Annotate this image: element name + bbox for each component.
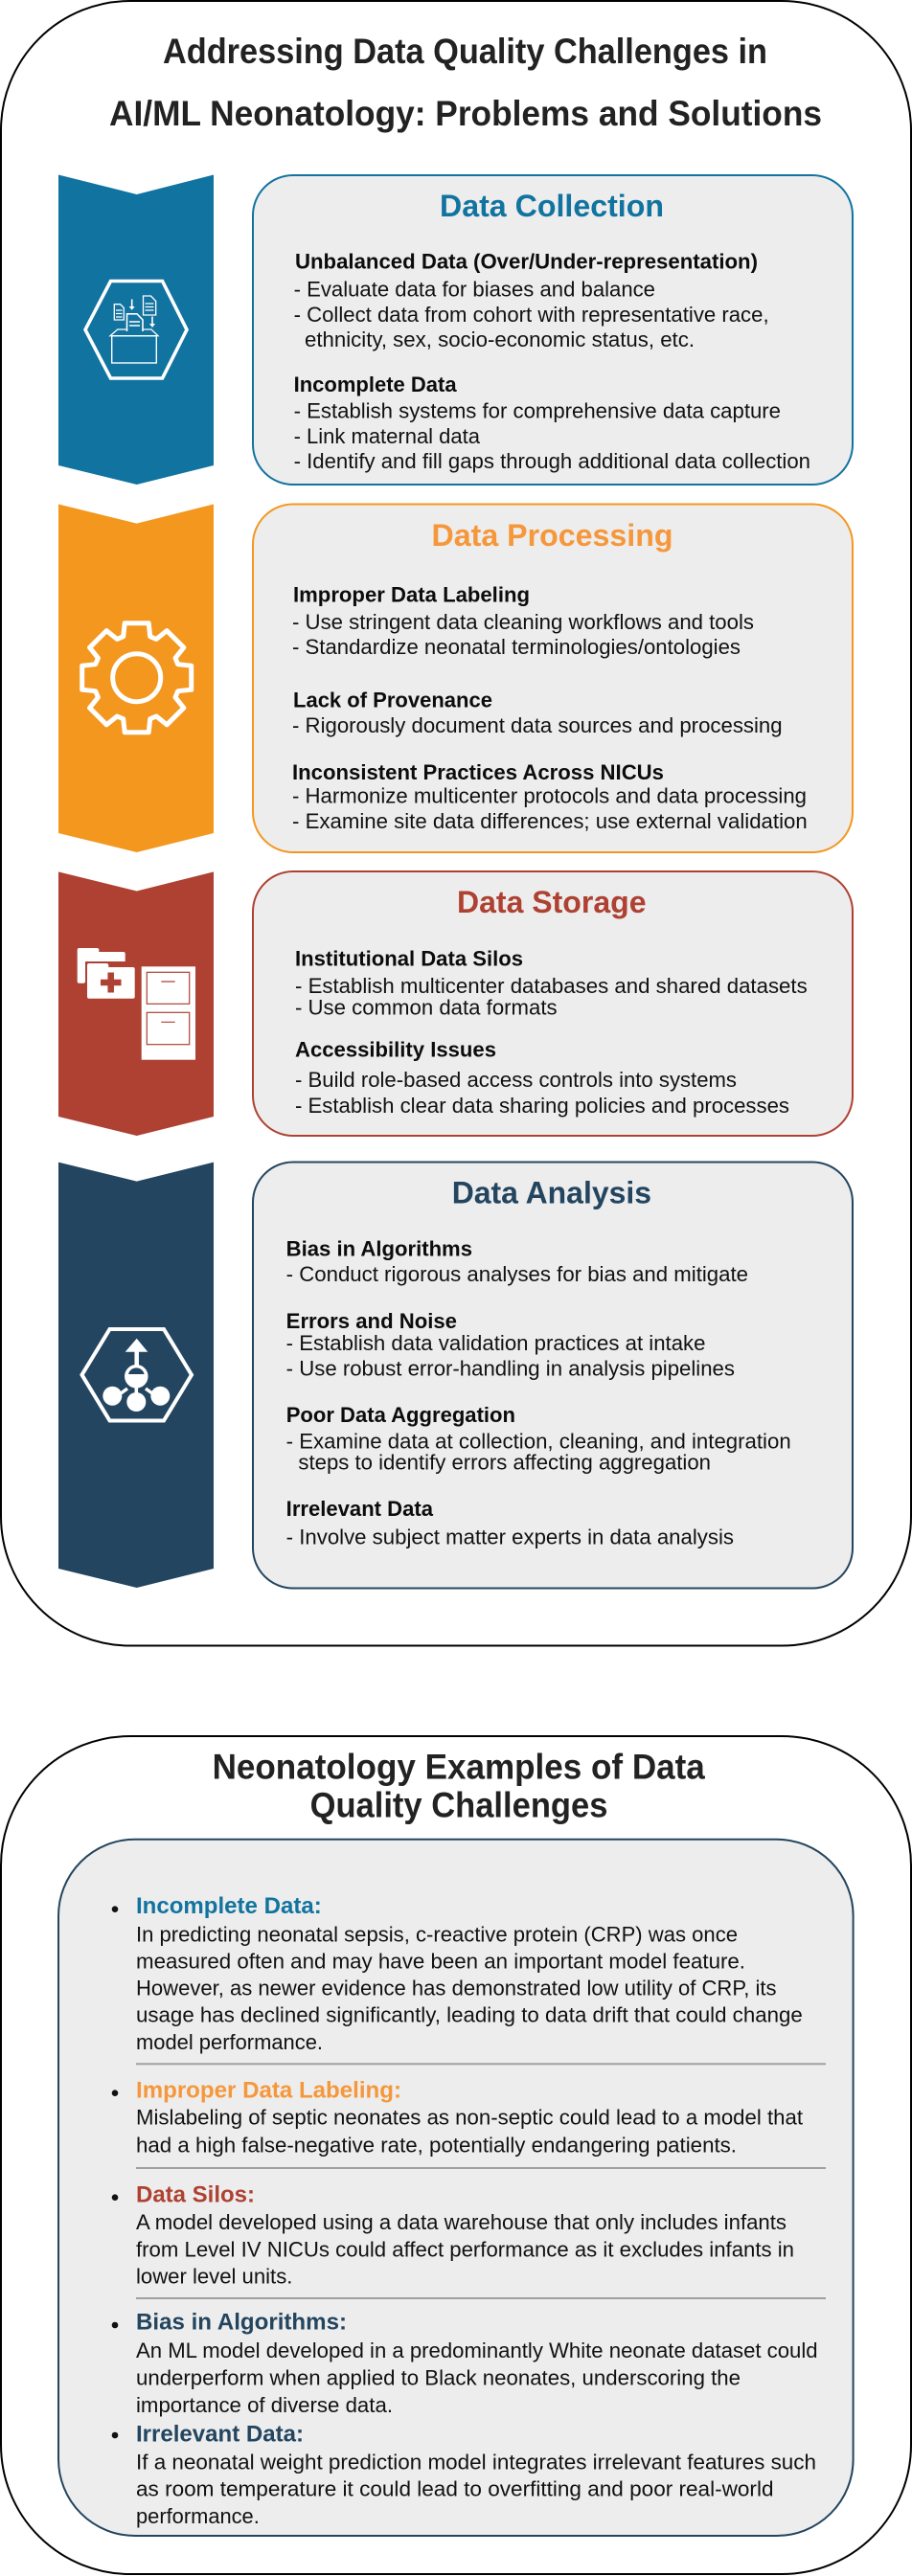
text block: institutional data silos: Institutional Data Silos xyxy=(295,947,523,971)
title xyxy=(213,1747,706,1825)
text block: bias in algorithms: Bias in Algorithms xyxy=(286,1236,472,1260)
example: irrelevant data: performance. xyxy=(136,2504,260,2528)
example: incomplete data: In predicting neonatal sepsis, c-reactive protein (CRP) was once xyxy=(136,1923,738,1947)
example: incomplete data: model performance. xyxy=(136,2030,323,2054)
text block: unbalanced data: - Collect data from cohort with representative race, xyxy=(294,303,769,327)
example: improper data labeling: had a high false-negative rate, potentially endangering patients. xyxy=(136,2133,737,2157)
text block: poor data aggregation xyxy=(286,1403,791,1475)
text block: irrelevant data xyxy=(286,1497,734,1548)
example: incomplete data: Incomplete Data: xyxy=(136,1893,322,1919)
text block: unbalanced data: Unbalanced Data (Over/Under-representation) xyxy=(295,249,758,274)
text block: errors and noise: Errors and Noise xyxy=(286,1309,457,1333)
chevron: data collection xyxy=(58,174,214,485)
text block: inconsistent practices: - Examine site data differences; use external validation xyxy=(292,809,808,833)
icon: gear xyxy=(82,623,192,733)
text block: improper data labeling xyxy=(292,583,754,659)
card: examples list xyxy=(58,1840,854,2536)
example: data silos xyxy=(112,2181,794,2288)
text block: accessibility issues xyxy=(295,1038,789,1118)
example: improper data labeling xyxy=(112,2078,803,2157)
chevron: data processing xyxy=(58,504,214,852)
text block: incomplete data: - Link maternal data xyxy=(294,424,481,448)
example: bias in algorithms: Bias in Algorithms: xyxy=(136,2310,347,2336)
text block: incomplete data xyxy=(294,373,810,473)
card: data processing xyxy=(253,504,853,852)
text block: irrelevant data: - Involve subject matter experts in data analysis xyxy=(286,1525,734,1548)
text block: inconsistent practices: Inconsistent Practices Across NICUs xyxy=(292,760,664,784)
text block: lack of provenance: Lack of Provenance xyxy=(293,689,492,712)
example: irrelevant data: as room temperature it could lead to overfitting and poor real-world xyxy=(136,2477,774,2501)
text block: institutional data silos: - Establish multicenter databases and shared datasets xyxy=(295,974,808,998)
panel: neonatology examples xyxy=(1,1736,911,2574)
text block: institutional data silos: - Use common data formats xyxy=(295,996,558,1019)
text block: improper data labeling: Improper Data Labeling xyxy=(293,583,530,607)
example: irrelevant data xyxy=(112,2421,816,2528)
text block: accessibility issues: - Build role-based access controls into systems xyxy=(295,1068,737,1092)
example: data silos: Data Silos: xyxy=(136,2181,255,2207)
panel: addressing data quality challenges xyxy=(1,1,911,1645)
text block: unbalanced data: - Evaluate data for biases and balance xyxy=(294,278,655,302)
example: data silos: lower level units. xyxy=(136,2264,292,2288)
title: AI/ML Neonatology: Problems and Solutions xyxy=(109,93,822,133)
text block: errors and noise: - Use robust error-handling in analysis pipelines xyxy=(286,1356,735,1380)
example: incomplete data: measured often and may have been an important model feature. xyxy=(136,1950,745,1974)
example: irrelevant data: If a neonatal weight prediction model integrates irrelevant features such xyxy=(136,2451,816,2474)
heading: data processing: Data Processing xyxy=(431,518,673,553)
text block: poor data aggregation: - Examine data at collection, cleaning, and integration xyxy=(286,1429,791,1453)
text block: lack of provenance: - Rigorously document data sources and processing xyxy=(292,713,783,737)
text block: incomplete data: - Establish systems for comprehensive data capture xyxy=(294,399,781,423)
example: incomplete data: However, as newer evidence has demonstrated low utility of CRP, its xyxy=(136,1977,776,2000)
title: Neonatology Examples of Data xyxy=(213,1747,706,1787)
title xyxy=(109,31,822,133)
text block: accessibility issues: - Establish clear data sharing policies and processes xyxy=(295,1094,789,1118)
example: incomplete data xyxy=(112,1893,803,2054)
example: bias in algorithms: importance of diverse data. xyxy=(136,2393,393,2417)
heading: data collection: Data Collection xyxy=(440,189,664,223)
example: incomplete data: usage has declined significantly, leading to data drift that could change xyxy=(136,2003,803,2027)
text block: lack of provenance xyxy=(292,689,783,737)
example: bias in algorithms: An ML model developed in a predominantly White neonate dataset could xyxy=(136,2339,818,2362)
text block: unbalanced data xyxy=(294,249,769,351)
title: Addressing Data Quality Challenges in xyxy=(163,31,767,71)
card: data analysis xyxy=(253,1163,853,1588)
text block: irrelevant data: Irrelevant Data xyxy=(286,1497,434,1521)
chevron: data analysis xyxy=(58,1163,214,1588)
example: improper data labeling: Mislabeling of septic neonates as non-septic could lead to a model that xyxy=(136,2105,803,2129)
card: data collection xyxy=(253,175,853,485)
text block: inconsistent practices xyxy=(292,760,808,833)
example: data silos: from Level IV NICUs could affect performance as it excludes infants in xyxy=(136,2237,794,2261)
icon: folders and file cabinet xyxy=(78,948,195,1060)
text block: unbalanced data: ethnicity, sex, socio-economic status, etc. xyxy=(305,328,695,351)
example: irrelevant data: Irrelevant Data: xyxy=(136,2421,304,2447)
text block: errors and noise xyxy=(286,1309,735,1380)
text block: bias in algorithms: - Conduct rigorous analyses for bias and mitigate xyxy=(286,1262,748,1286)
text block: incomplete data: Incomplete Data xyxy=(294,373,457,396)
card: data storage xyxy=(253,871,853,1136)
text block: poor data aggregation: Poor Data Aggregation xyxy=(286,1403,515,1427)
chevron: data storage xyxy=(58,871,214,1136)
text block: institutional data silos xyxy=(295,947,808,1019)
heading: data storage: Data Storage xyxy=(457,885,646,919)
example: improper data labeling: Improper Data Labeling: xyxy=(136,2078,401,2104)
text block: improper data labeling: - Standardize neonatal terminologies/ontologies xyxy=(292,635,741,659)
example: bias in algorithms xyxy=(112,2310,818,2417)
icon: documents into box xyxy=(85,282,187,378)
heading: data analysis: Data Analysis xyxy=(452,1175,651,1209)
text block: inconsistent practices: - Harmonize multicenter protocols and data processing xyxy=(292,783,807,808)
icon: network arrow hexagon xyxy=(82,1329,192,1421)
example: bias in algorithms: underperform when applied to Black neonates, underscoring the xyxy=(136,2366,741,2390)
text block: incomplete data: - Identify and fill gaps through additional data collection xyxy=(294,449,810,473)
text block: bias in algorithms xyxy=(286,1236,748,1286)
example: data silos: A model developed using a data warehouse that only includes infants xyxy=(136,2210,787,2234)
text block: improper data labeling: - Use stringent data cleaning workflows and tools xyxy=(292,610,754,634)
title: Quality Challenges xyxy=(310,1785,607,1825)
text block: accessibility issues: Accessibility Issues xyxy=(295,1038,496,1062)
text block: errors and noise: - Establish data validation practices at intake xyxy=(286,1331,705,1355)
text block: poor data aggregation: steps to identify errors affecting aggregation xyxy=(298,1451,711,1475)
